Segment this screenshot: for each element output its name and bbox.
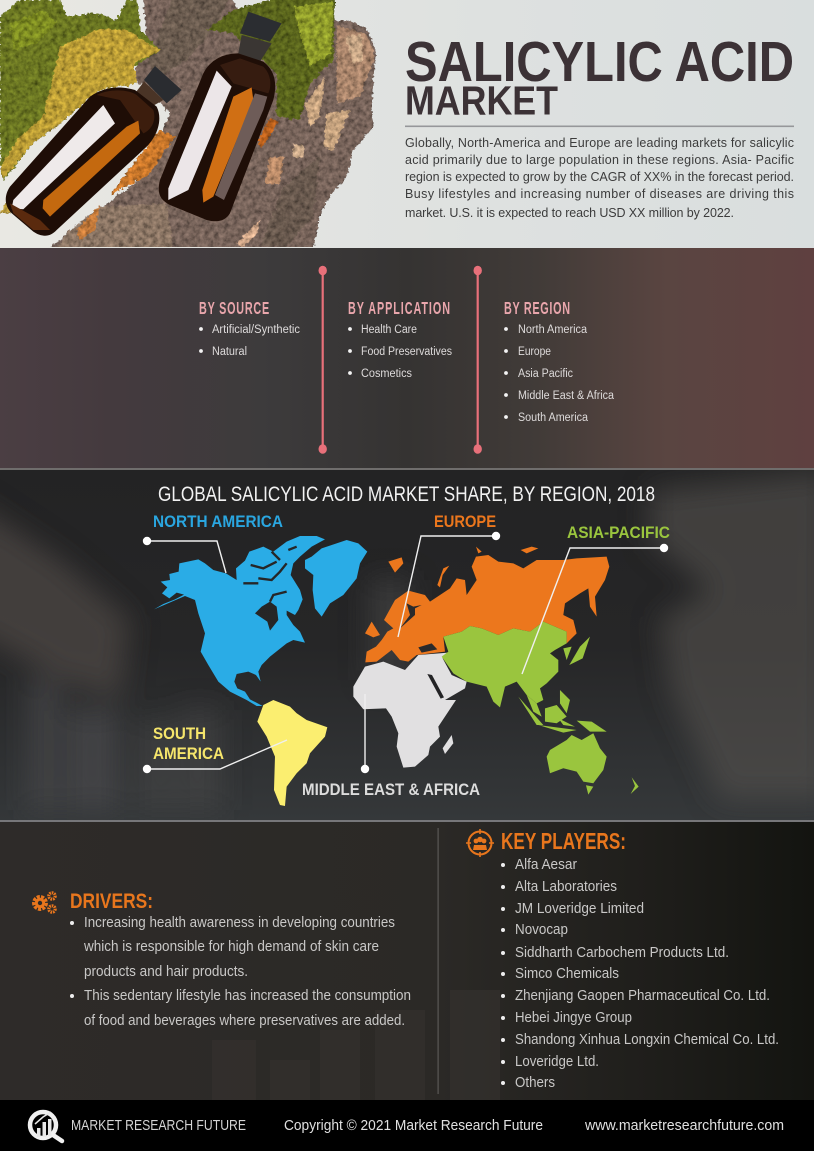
text block: intro: Globally, North-America and Europe are leading markets for salicylic (405, 136, 794, 150)
icon: logo magnifier (30, 1112, 62, 1141)
divider: right (474, 266, 482, 454)
text block: key players list: Novocap (515, 922, 568, 938)
text block: drivers list: products and hair products. (84, 964, 248, 980)
list: by source: Artificial/Synthetic (212, 324, 300, 336)
list: by region: Asia Pacific (518, 368, 573, 380)
title (405, 30, 794, 124)
text block: intro: market. U.S. it is expected to reach USD XX million by 2022. (405, 206, 734, 220)
heading: key players: KEY PLAYERS: (501, 828, 626, 854)
text block: intro: Busy lifestyles and increasing number of diseases are driving this (405, 187, 794, 201)
label: asia-pacific: ASIA-PACIFIC (567, 523, 670, 542)
text: brand: MARKET RESEARCH FUTURE (71, 1117, 246, 1134)
text block: key players list (501, 857, 779, 1091)
label: south america: SOUTH (153, 724, 206, 743)
heading: map: GLOBAL SALICYLIC ACID MARKET SHARE, BY REGION, 2018 (158, 483, 655, 506)
list: by region: Middle East & Africa (518, 390, 615, 402)
list: by application (348, 299, 452, 380)
label: middle east and africa: MIDDLE EAST & AFRICA (302, 780, 480, 799)
panel: header (0, 0, 814, 250)
text block: key players list: Simco Chemicals (515, 966, 619, 982)
leader: north america (143, 537, 226, 573)
label: north america: NORTH AMERICA (153, 512, 283, 531)
text block: key players list: Siddharth Carbochem Products Ltd. (515, 945, 729, 961)
text block: key players list: JM Loveridge Limited (515, 901, 644, 917)
panel: world map (0, 470, 814, 822)
map: asia pacific (442, 622, 639, 795)
text block: drivers list: which is responsible for high demand of skin care (83, 939, 379, 955)
label: south america (153, 724, 224, 763)
text block: drivers list: Increasing health awareness in developing countries (84, 915, 395, 931)
icon: key players (466, 829, 494, 857)
text block: intro (405, 126, 794, 220)
list: by region: BY REGION (504, 299, 570, 319)
panel: segmentation (0, 248, 814, 470)
label: europe: EUROPE (434, 512, 496, 531)
text block: drivers list: of food and beverages where preservatives are added. (84, 1013, 405, 1029)
divider: left (318, 266, 327, 454)
text block: intro: acid primarily due to large population in these regions. Asia- Pacific (405, 153, 794, 167)
text block: intro: region is expected to grow by the CAGR of XX% in the forecast period. (405, 170, 794, 184)
text block: key players list: Others (515, 1075, 555, 1091)
icon: gears (35, 893, 55, 912)
list: by source: Natural (212, 346, 247, 358)
text block: drivers list: This sedentary lifestyle has increased the consumption (84, 988, 411, 1004)
text block: key players list: Hebei Jingye Group (515, 1010, 632, 1026)
text block: drivers list (70, 915, 411, 1029)
list: by region: North America (518, 324, 588, 336)
list: by application: Health Care (361, 324, 417, 336)
list: by application: Cosmetics (361, 368, 412, 380)
text block: key players list: Alta Laboratories (515, 879, 617, 895)
text: copyright: Copyright © 2021 Market Research Future (284, 1118, 543, 1134)
leader: europe (398, 532, 500, 637)
text: website: www.marketresearchfuture.com (584, 1118, 784, 1134)
map: north america (154, 536, 367, 706)
photo: amber bottles on bark and moss (0, 0, 377, 250)
bottle: small (6, 66, 182, 236)
text block: key players list: Shandong Xinhua Longxin Chemical Co. Ltd. (515, 1032, 779, 1048)
list: by application: Food Preservatives (361, 346, 452, 358)
panel: footer (0, 1100, 814, 1151)
list: by application: BY APPLICATION (348, 299, 450, 319)
label: south america: AMERICA (153, 744, 224, 763)
map: middle east and africa (353, 653, 467, 768)
heading: drivers: DRIVERS: (70, 890, 153, 913)
text block: key players list: Alfa Aesar (515, 857, 577, 873)
map: south america (257, 700, 327, 806)
title: MARKET (405, 78, 558, 124)
list: by source (199, 299, 300, 358)
list: by source: BY SOURCE (199, 299, 269, 319)
list: by region (504, 299, 615, 424)
list: by region: Europe (518, 346, 551, 358)
map: europe and russia (365, 547, 609, 662)
panel: drivers and key players (0, 822, 814, 1100)
leader: asia-pacific (522, 544, 668, 674)
leader: middle east and africa (361, 694, 369, 773)
list: by region: South America (518, 412, 589, 424)
leader: south america (143, 740, 287, 773)
text block: key players list: Zhenjiang Gaopen Pharmaceutical Co. Ltd. (515, 988, 770, 1004)
bottle: large (159, 12, 282, 221)
text block: key players list: Loveridge Ltd. (515, 1054, 599, 1070)
